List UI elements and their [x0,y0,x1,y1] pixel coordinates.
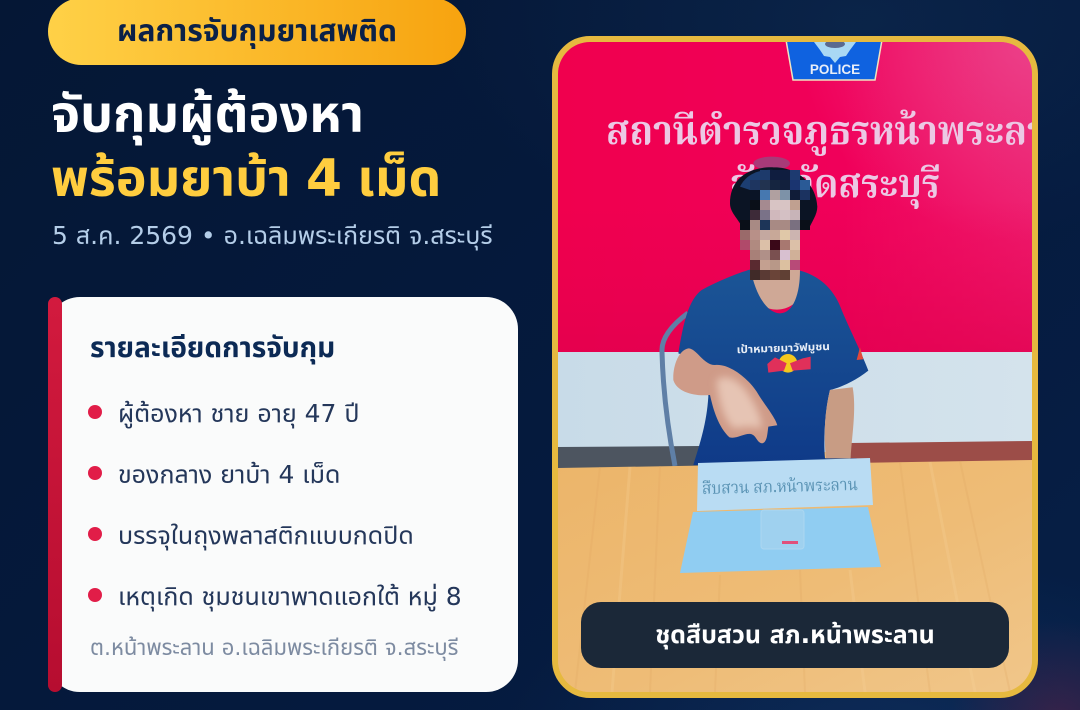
location footnote: ต.หน้าพระลาน อ.เฉลิมพระเกียรติ จ.สระบุรี [90,636,458,661]
panel heading: รายละเอียดการจับกุม [90,331,335,364]
police badge: POLICE [810,62,860,77]
shirt logo [767,354,811,373]
photo caption: ชุดสืบสวน สภ.หน้าพระลาน [655,620,935,649]
chair [662,313,688,466]
floor skirting [558,441,1032,470]
shirt slogan: เป้าหมายมาวัฟมูชน [736,340,830,356]
card background [48,297,518,692]
name card on table: สืบสวน สภ.หน้าพระลาน [702,473,858,504]
red backdrop [558,42,1032,354]
detail: evidence: ของกลาง ยาบ้า 4 เม็ด [118,460,340,489]
bullet dot 3 [88,527,102,541]
bullet dot 2 [88,466,102,480]
title line 1: จับกุมผู้ต้องหา [51,85,364,145]
title line 2: พร้อมยาบ้า 4 เม็ด [51,149,441,209]
header pill: ผลการจับกุมยาเสพติด [48,0,466,65]
evidence bag [761,510,804,549]
sleeve logo [857,347,863,360]
date and location subtitle: 5 ส.ค. 2569 • อ.เฉลิมพระเกียรติ จ.สระบุรี [52,221,493,250]
lower white wall [558,352,1032,452]
panel: arrest details [48,297,518,692]
right arm [825,387,854,458]
bullet dot 1 [88,405,102,419]
panel: photo frame [552,36,1038,698]
detail: suspect: ผู้ต้องหา ชาย อายุ 47 ปี [118,399,360,428]
pixel mosaic [740,170,810,280]
hair tuft [753,157,790,170]
person, pixelated face [673,157,868,465]
neck [750,267,800,310]
photo caption [581,602,1009,668]
blue paper [680,507,881,573]
wall sign: province: จังหวัดสระบุรี [730,155,940,219]
police badge [786,40,882,80]
detail: packaging: บรรจุในถุงพลาสติกแบบกดปิด [118,521,414,550]
hand highlight [717,377,762,428]
name card on table [697,458,873,511]
hair [730,167,817,230]
wooden table [558,460,1032,692]
photo illustration [558,42,1032,692]
pointing arm [673,348,777,443]
red accent bar [48,297,62,692]
header pill: ผลการจับกุมยาเสพติด: ผลการจับกุมยาเสพติด [117,14,397,49]
t-shirt [678,269,868,465]
detail: place: เหตุเกิด ชุมชนเขาพาดแอกใต้ หมู่ 8 [118,582,462,611]
bullet dot 4 [88,588,102,602]
